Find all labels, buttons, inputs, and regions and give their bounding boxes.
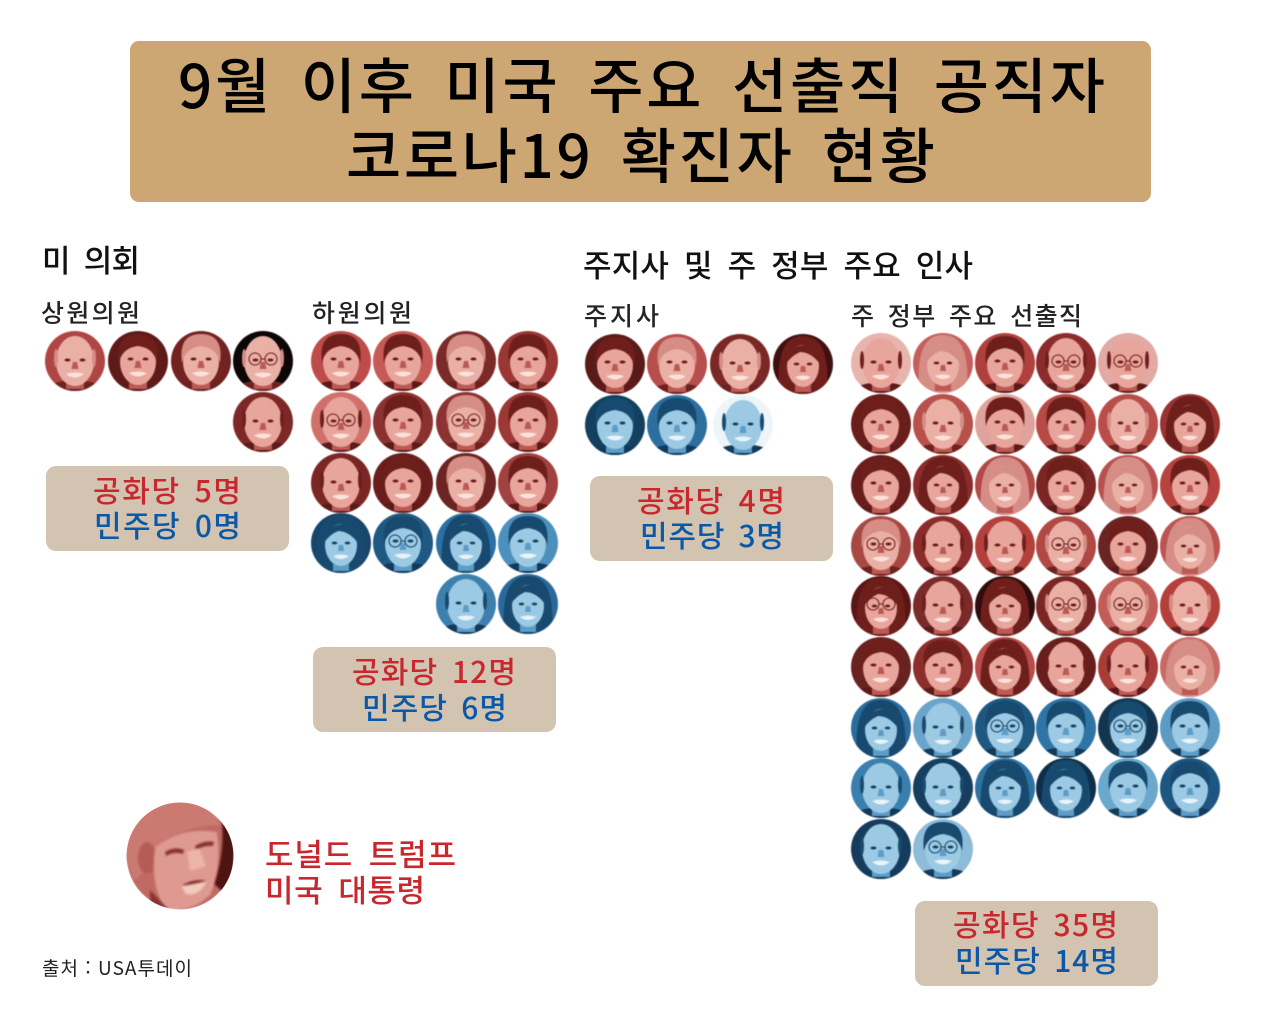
representative portraits bbox=[311, 331, 558, 634]
portrait: President Trump bbox=[125, 800, 236, 913]
senate party count box: 민주당 0명 bbox=[94, 502, 241, 546]
senator portraits bbox=[45, 331, 293, 452]
subheading: representatives: 하원의원 bbox=[312, 294, 412, 330]
house party count box: 민주당 6명 bbox=[362, 684, 507, 728]
title banner: 코로나19 확진자 현황 bbox=[346, 109, 935, 196]
subheading: senators: 상원의원 bbox=[41, 294, 140, 330]
panel: representatives bbox=[311, 294, 558, 732]
state official portraits bbox=[851, 333, 1220, 879]
governor party count box bbox=[590, 476, 833, 561]
governor party count box: 공화당 4명 bbox=[637, 477, 785, 521]
title banner bbox=[130, 39, 1151, 202]
subheading: governors: 주지사 bbox=[584, 297, 659, 333]
panel: governors bbox=[584, 297, 833, 561]
subheading: state elected officials: 주 정부 주요 선출직 bbox=[851, 297, 1082, 333]
governor portraits bbox=[585, 334, 833, 455]
panel: state elected officials bbox=[851, 297, 1220, 986]
senate party count box bbox=[46, 466, 289, 551]
title banner: 9월 이후 미국 주요 선출직 공직자 bbox=[178, 39, 1105, 126]
panel: senators bbox=[41, 294, 293, 551]
state officials party count box: 민주당 14명 bbox=[955, 937, 1118, 981]
label: President Trump: 미국 대통령 bbox=[265, 866, 425, 911]
state officials party count box: 공화당 35명 bbox=[953, 901, 1118, 945]
governor party count box: 민주당 3명 bbox=[640, 512, 784, 556]
label: President Trump: 도널드 트럼프 bbox=[265, 830, 456, 875]
label: President Trump bbox=[265, 830, 456, 911]
source note: 출처 : USA투데이 bbox=[42, 954, 192, 981]
house party count box: 공화당 12명 bbox=[352, 648, 516, 692]
heading: Congress: 미 의회 bbox=[42, 236, 140, 281]
state officials party count box bbox=[915, 901, 1158, 986]
house party count box bbox=[313, 647, 556, 732]
heading: governors and state officials: 주지사 및 주 정부 주요 인사 bbox=[583, 241, 973, 286]
senate party count box: 공화당 5명 bbox=[93, 467, 241, 511]
